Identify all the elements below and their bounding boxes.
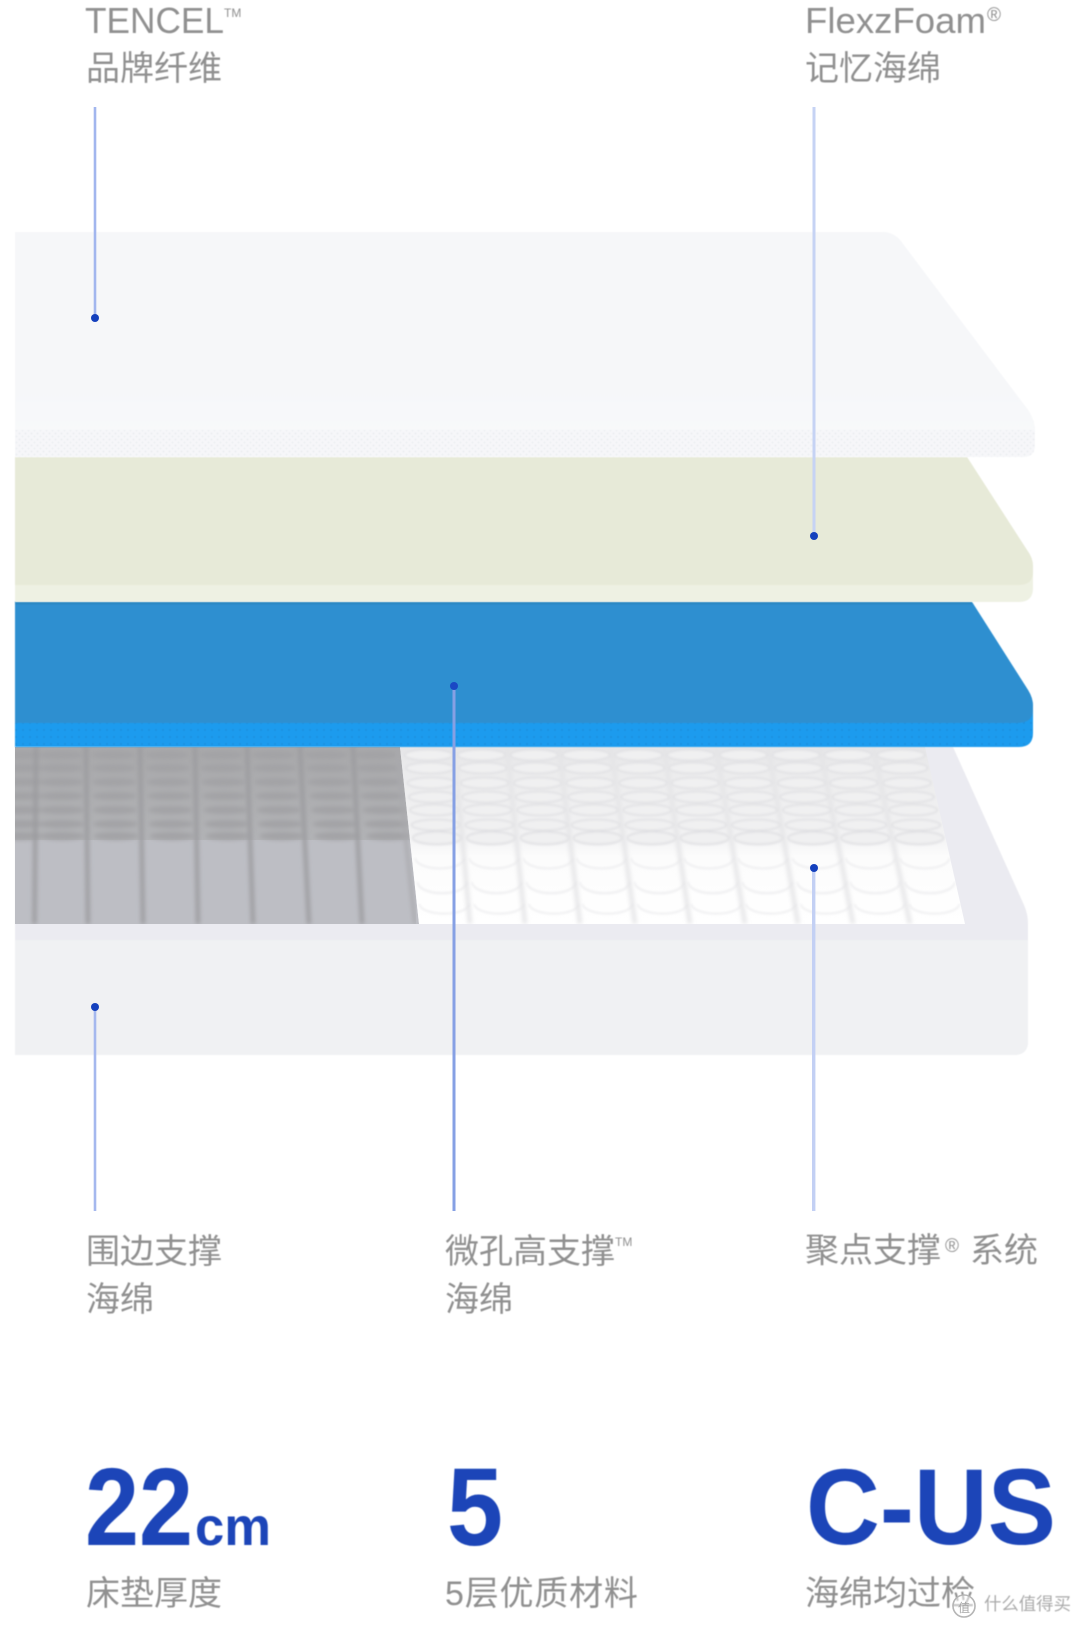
label: micro-porous high support foam: 海绵 bbox=[445, 1281, 513, 1319]
spring block: white side bbox=[398, 747, 970, 924]
spring block: grey cut-away side bbox=[0, 747, 425, 924]
layer: perimeter support foam base bbox=[15, 747, 1028, 1055]
icon: watermark badge: 值 bbox=[958, 1600, 970, 1615]
label: focused support system: 系统 bbox=[970, 1232, 1038, 1270]
layer: FlexzFoam memory foam (green) bbox=[15, 457, 1033, 602]
label: micro-porous high support foam bbox=[445, 1233, 632, 1319]
label: FlexzFoam memory foam: ® bbox=[987, 5, 1001, 26]
stat: mattress thickness: 床垫厚度 bbox=[86, 1575, 222, 1613]
stat: mattress thickness bbox=[85, 1446, 271, 1613]
watermark bbox=[953, 1594, 1071, 1617]
layer: pocket spring system bbox=[0, 747, 970, 924]
stat: five layers: 5层优质材料 bbox=[445, 1575, 639, 1613]
label: micro-porous high support foam: TM bbox=[615, 1235, 632, 1249]
label: perimeter support foam bbox=[86, 1233, 222, 1319]
label: TENCEL brand fibre bbox=[85, 0, 241, 88]
leader line and dot bbox=[91, 1003, 99, 1211]
stat: mattress thickness: 22 bbox=[85, 1446, 193, 1569]
leader line and dot bbox=[91, 107, 99, 322]
mattress layer stack bbox=[0, 232, 1035, 1055]
label: focused support system: 聚点支撑 bbox=[805, 1232, 941, 1270]
watermark: 什么值得买 bbox=[984, 1594, 1071, 1614]
layer: TENCEL fibre top (white) bbox=[15, 232, 1035, 457]
stat: C-US certification bbox=[805, 1446, 1056, 1613]
leader line and dot bbox=[810, 107, 818, 540]
stat: five layers bbox=[445, 1446, 639, 1613]
label: TENCEL brand fibre: 品牌纤维 bbox=[86, 50, 222, 88]
label: perimeter support foam: 围边支撑 bbox=[86, 1233, 222, 1271]
label: FlexzFoam memory foam: 记忆海绵 bbox=[805, 50, 941, 88]
stat: mattress thickness: cm bbox=[195, 1497, 271, 1557]
label: FlexzFoam memory foam: FlexzFoam bbox=[805, 0, 986, 41]
label: perimeter support foam: 海绵 bbox=[86, 1281, 154, 1319]
label: focused support system bbox=[805, 1232, 1038, 1270]
label: FlexzFoam memory foam bbox=[805, 0, 1001, 88]
callout: micro-porous foam bbox=[445, 682, 632, 1319]
stat: five layers: 5 bbox=[447, 1446, 503, 1569]
label: TENCEL brand fibre: TM bbox=[224, 6, 241, 20]
callout: TENCEL bbox=[85, 0, 241, 322]
callout: pocket springs bbox=[805, 864, 1038, 1270]
callout: FlexzFoam bbox=[805, 0, 1001, 540]
stat: C-US certification: C-US bbox=[806, 1446, 1056, 1567]
label: focused support system: ® bbox=[945, 1236, 959, 1257]
label: micro-porous high support foam: 微孔高支撑 bbox=[445, 1233, 615, 1271]
stat: C-US certification: 海绵均过检 bbox=[805, 1575, 975, 1613]
callout: perimeter foam bbox=[86, 1003, 222, 1319]
label: TENCEL brand fibre: TENCEL bbox=[85, 0, 224, 41]
leader line and dot bbox=[450, 682, 458, 1211]
leader line and dot bbox=[810, 864, 818, 1211]
layer: micro-porous high support foam (blue) bbox=[15, 602, 1033, 747]
